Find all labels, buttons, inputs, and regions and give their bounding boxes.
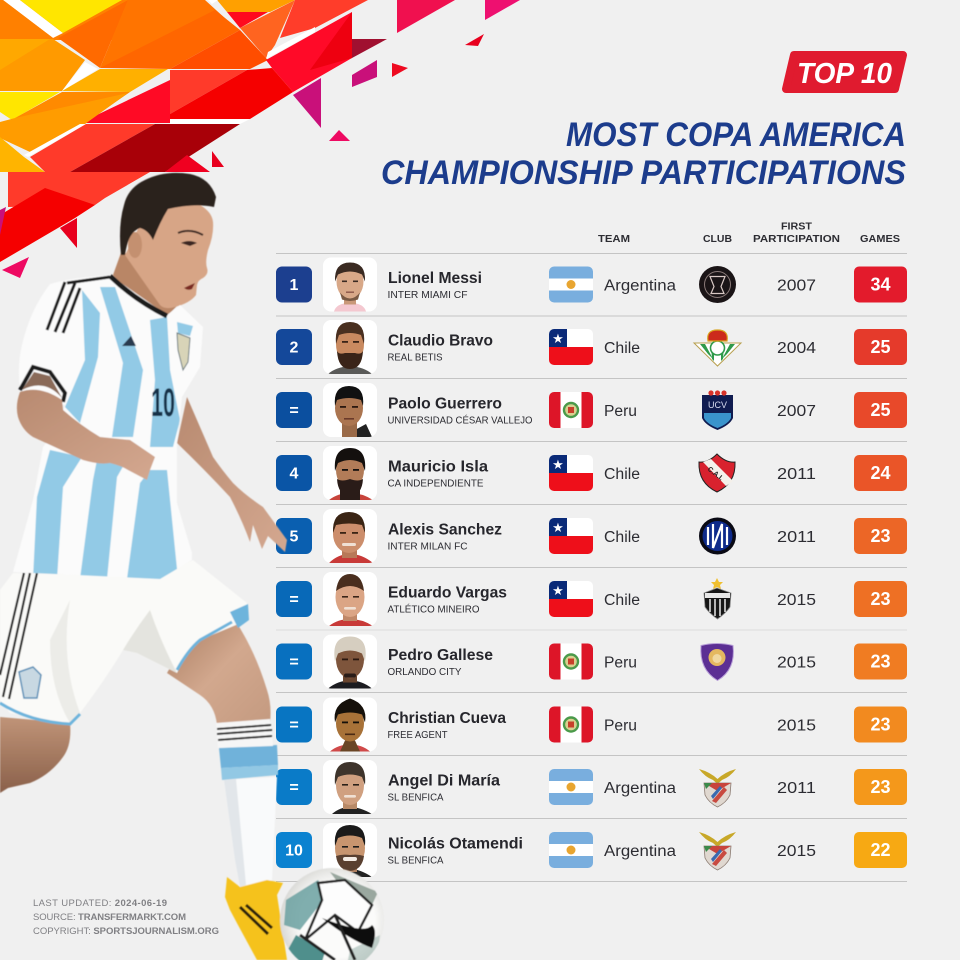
rank <box>276 581 312 617</box>
club crest: Inter Miami <box>699 266 736 303</box>
club name: INTER MILAN FC <box>388 540 468 552</box>
games <box>854 266 907 302</box>
table header: GAMES <box>860 233 900 245</box>
footer credits <box>33 898 219 937</box>
club crest: Benfica <box>699 769 736 807</box>
first participation: 2004 <box>777 340 816 357</box>
flag: Argentina <box>549 266 593 302</box>
table header: TEAM <box>598 233 630 245</box>
rank: 1 <box>290 277 299 294</box>
club name: SL BENFICA <box>388 854 444 866</box>
first participation: 2011 <box>777 466 816 483</box>
games: 23 <box>870 714 891 734</box>
first participation: 2007 <box>777 278 816 294</box>
row 2: Claudio Bravo <box>276 320 907 374</box>
row 6: Eduardo Vargas <box>276 572 907 626</box>
portrait <box>323 698 377 752</box>
jersey <box>13 275 203 579</box>
team: Peru <box>604 403 637 420</box>
row 7: Pedro Gallese <box>276 634 907 688</box>
first participation: 2007 <box>777 403 816 420</box>
name: Lionel Messi <box>388 270 482 287</box>
rank <box>276 518 312 554</box>
portrait <box>323 760 377 814</box>
flag: Chile <box>549 329 593 365</box>
flag: Argentina <box>549 769 593 805</box>
sock <box>216 719 278 887</box>
rank <box>276 644 312 680</box>
first participation: 2015 <box>777 718 816 734</box>
portrait <box>323 634 377 688</box>
portrait <box>323 823 377 877</box>
portrait <box>323 258 377 312</box>
badge: top 10: TOP 10 <box>797 58 892 90</box>
team: Argentina <box>604 843 676 860</box>
club name: UNIVERSIDAD CÉSAR VALLEJO <box>388 414 532 426</box>
games: 25 <box>870 400 891 420</box>
flag: Chile: ★ <box>552 331 564 346</box>
right arm <box>177 397 287 552</box>
club crest: UCV <box>702 390 733 430</box>
name: Eduardo Vargas <box>388 584 507 602</box>
name: Claudio Bravo <box>388 332 493 350</box>
games: 23 <box>870 652 891 672</box>
team: Argentina <box>604 278 676 294</box>
first participation: 2015 <box>777 843 816 860</box>
rank <box>276 832 312 868</box>
club name: ORLANDO CITY <box>388 666 462 678</box>
name: Angel Di María <box>388 772 500 790</box>
club crest: UCV: UCV <box>708 400 727 410</box>
title: MOST COPA AMERICA <box>566 116 906 154</box>
name: Pedro Gallese <box>388 647 493 664</box>
games: 34 <box>870 274 891 294</box>
row 8: Christian Cueva <box>276 698 907 752</box>
club name: REAL BETIS <box>388 352 442 364</box>
team: Peru <box>604 718 637 734</box>
portrait <box>323 572 377 626</box>
club crest: Independiente: C.A.I. <box>706 466 724 482</box>
row 5: Alexis Sanchez <box>276 509 907 563</box>
rank: = <box>289 717 299 734</box>
club crest: Benfica <box>699 832 736 870</box>
games: 25 <box>870 337 891 357</box>
flag: Chile <box>549 518 593 554</box>
games: 24 <box>870 463 891 483</box>
portrait <box>323 383 377 437</box>
club name: INTER MIAMI CF <box>388 289 468 301</box>
games: 23 <box>870 589 891 609</box>
team: Chile <box>604 529 640 546</box>
games <box>854 581 907 617</box>
club name: ATLÉTICO MINEIRO <box>388 602 480 616</box>
rank <box>276 392 312 428</box>
club crest: Orlando City <box>701 644 733 680</box>
games: 23 <box>870 777 891 797</box>
hair <box>120 173 216 255</box>
flag: Chile: ★ <box>552 583 564 598</box>
flag: Chile <box>549 581 593 617</box>
title <box>381 116 906 192</box>
rank: = <box>289 780 299 796</box>
footer credits: LAST UPDATED: 2024-06-19 <box>33 898 167 909</box>
name: Mauricio Isla <box>388 458 488 476</box>
team: Argentina <box>604 780 676 797</box>
games <box>854 518 907 554</box>
first participation: 2015 <box>777 654 816 672</box>
table header: FIRST <box>781 220 813 232</box>
flag: Argentina <box>549 832 593 868</box>
club crest: Real Betis <box>694 330 741 366</box>
club name: CA INDEPENDIENTE <box>388 478 484 490</box>
portrait <box>323 446 377 500</box>
flag: Peru <box>549 706 593 742</box>
front leg <box>167 617 271 725</box>
title: CHAMPIONSHIP PARTICIPATIONS <box>381 154 906 192</box>
portrait <box>323 509 377 563</box>
row 4: Mauricio Isla <box>276 446 907 500</box>
rank: = <box>289 654 299 671</box>
club crest: Atletico Mineiro <box>704 578 731 619</box>
table header <box>598 220 900 245</box>
name: Nicolás Otamendi <box>388 836 523 852</box>
row 10: Nicolas Otamendi <box>276 823 907 877</box>
name: Paolo Guerrero <box>388 396 502 412</box>
name: Christian Cueva <box>388 710 506 727</box>
games <box>854 329 907 365</box>
jersey: 10 <box>151 381 175 425</box>
row 3: Paolo Guerrero <box>276 383 907 437</box>
flag: Peru <box>549 644 593 680</box>
games <box>854 769 907 805</box>
team: Peru <box>604 654 637 672</box>
rank <box>276 329 312 365</box>
games <box>854 706 907 742</box>
portrait <box>323 320 377 374</box>
flag: Peru <box>549 392 593 428</box>
rank <box>276 769 312 805</box>
games <box>854 392 907 428</box>
footer credits: SOURCE: TRANSFERMARKT.COM <box>33 912 186 923</box>
left arm and hand <box>17 390 155 480</box>
team: Chile <box>604 592 640 609</box>
rank: 4 <box>290 466 299 482</box>
row 1: Lionel Messi <box>276 258 907 312</box>
first participation: 2011 <box>777 780 816 797</box>
team: Chile <box>604 340 640 357</box>
first participation: 2011 <box>777 529 816 546</box>
team: Chile <box>604 466 640 483</box>
flag: Chile: ★ <box>552 457 564 472</box>
games: 22 <box>870 840 891 860</box>
games: 23 <box>870 526 891 546</box>
table header: CLUB <box>703 233 732 245</box>
games <box>854 832 907 868</box>
rank <box>276 455 312 491</box>
row 9: Angel Di Maria <box>276 760 907 814</box>
games <box>854 644 907 680</box>
table header: PARTICIPATION <box>753 233 840 245</box>
rank: 5 <box>290 528 299 546</box>
decorative geometric banner <box>0 0 520 278</box>
flag: Chile <box>549 455 593 491</box>
boot <box>225 877 287 960</box>
shorts <box>0 560 249 724</box>
name: Alexis Sanchez <box>388 522 502 538</box>
rank: = <box>289 592 299 608</box>
first participation: 2015 <box>777 592 816 609</box>
rank: 10 <box>285 842 303 860</box>
club crest: Independiente <box>699 454 735 492</box>
rank <box>276 266 312 302</box>
games <box>854 455 907 491</box>
rank <box>276 706 312 742</box>
club name: SL BENFICA <box>388 792 444 804</box>
rank: = <box>289 402 299 420</box>
footer credits: COPYRIGHT: SPORTSJOURNALISM.ORG <box>33 926 219 937</box>
flag: Chile: ★ <box>552 520 564 535</box>
rank: 2 <box>290 340 299 356</box>
player illustration: Lionel Messi <box>0 173 384 960</box>
club crest: Inter Milan <box>699 518 736 554</box>
club name: FREE AGENT <box>388 729 448 741</box>
back leg <box>0 717 70 793</box>
neck and face <box>113 205 213 316</box>
ball <box>280 868 384 960</box>
